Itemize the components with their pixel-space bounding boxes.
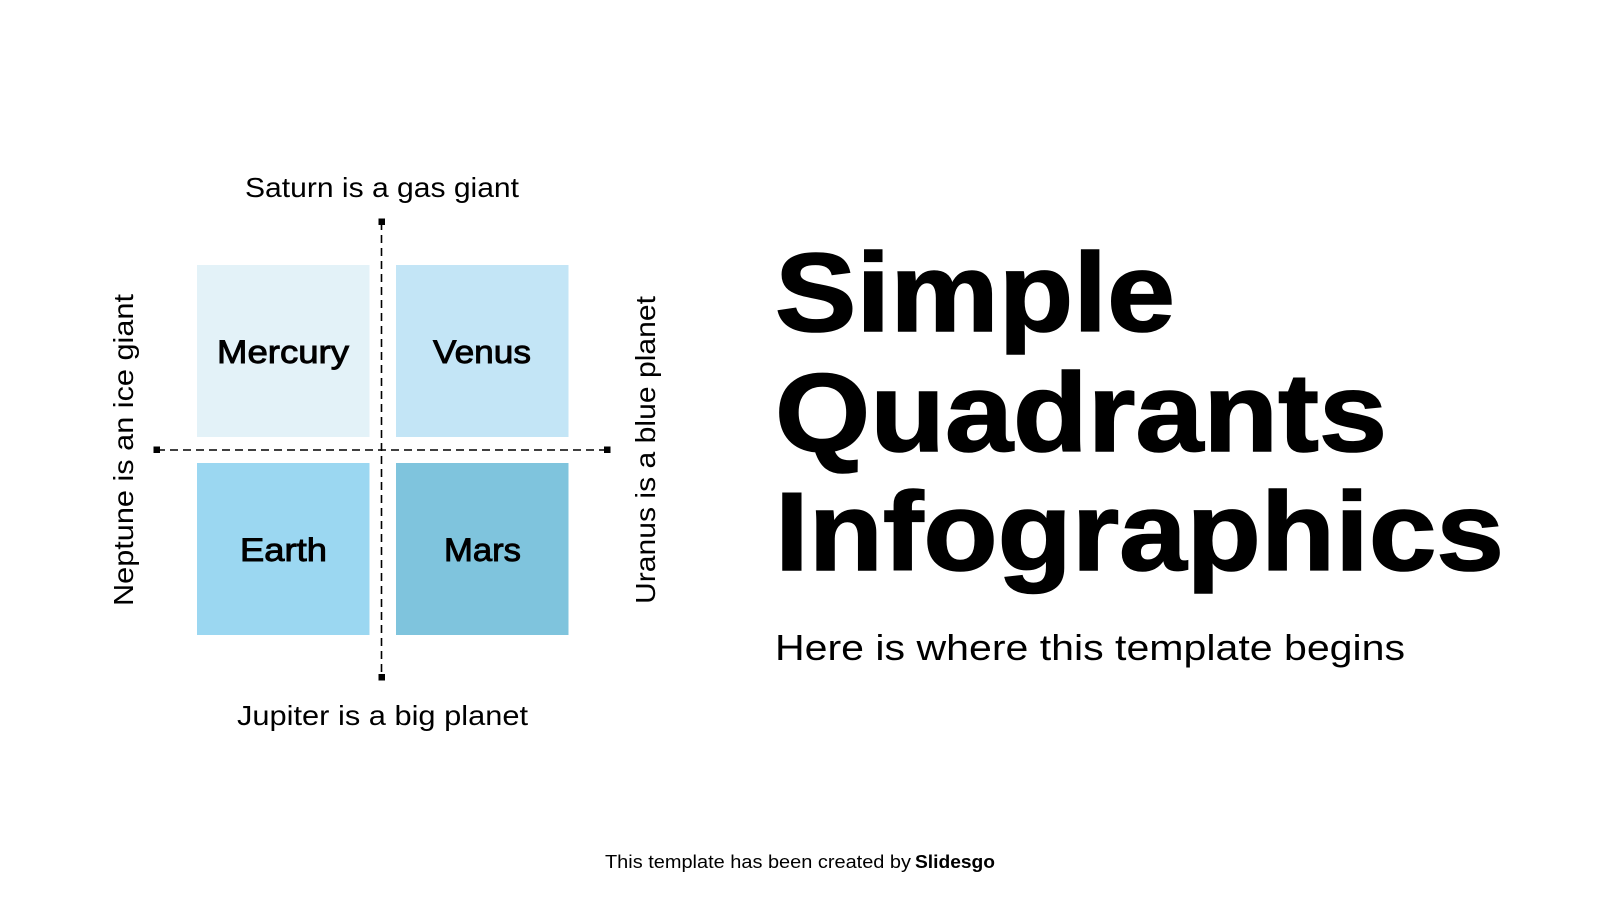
quadrant: Earth	[197, 463, 370, 635]
subtitle: Here is where this template begins	[775, 627, 1405, 668]
footer credit: Slidesgo	[915, 852, 995, 872]
vertical axis	[378, 218, 385, 680]
quadrant: Venus: Venus	[433, 334, 531, 370]
axis label: top: Saturn is a gas giant	[245, 172, 519, 203]
title: Simple	[775, 231, 1175, 355]
quadrant: Mars	[396, 463, 568, 635]
footer credit: This template has been created by	[605, 852, 911, 872]
title: Quadrants	[775, 351, 1387, 475]
horizontal axis	[154, 446, 610, 453]
quadrant: Mars: Mars	[444, 532, 521, 568]
axis label: left: Neptune is an ice giant	[108, 294, 139, 606]
quadrant: Venus	[396, 265, 568, 437]
axis label: right: Uranus is a blue planet	[630, 296, 661, 604]
quadrant: Mercury: Mercury	[217, 334, 349, 370]
axis label: bottom: Jupiter is a big planet	[237, 700, 528, 731]
title	[775, 231, 1504, 594]
quadrant: Earth: Earth	[240, 532, 327, 568]
title: Infographics	[775, 470, 1504, 594]
panel: quadrant diagram	[108, 172, 661, 731]
quadrant: Mercury	[197, 265, 370, 437]
